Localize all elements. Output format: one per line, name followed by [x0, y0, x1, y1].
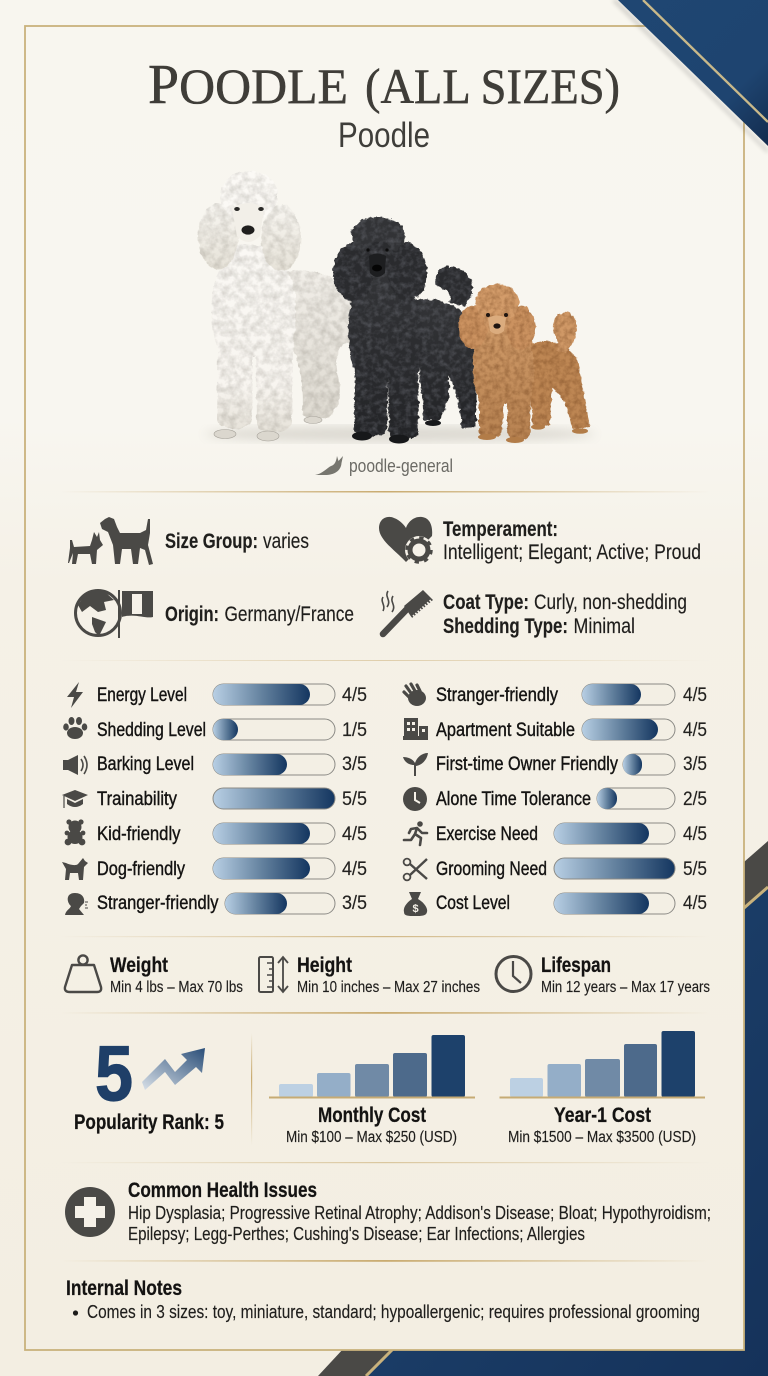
rating: alone time tolerance [403, 787, 707, 811]
rating: cost level: Cost Level [436, 892, 510, 914]
rating: stranger-friendly right: 4/5 [683, 684, 707, 706]
title: POODLE [148, 54, 348, 116]
icon: comb [382, 590, 433, 634]
stat: height [259, 953, 480, 996]
ground shadow [205, 426, 595, 442]
stat: weight: Weight [110, 953, 168, 977]
panel: common health issues: Epilepsy; Legg-Perthes; Cushing's Disease; Ear Infections; Allergies [128, 1223, 585, 1244]
black standard poodle [333, 217, 476, 444]
rating: stranger-friendly: Stranger-friendly [97, 892, 219, 914]
fact: size group: varies [263, 529, 309, 553]
rating: grooming need: 5/5 [683, 858, 707, 880]
rating: alone time tolerance: 2/5 [683, 788, 707, 810]
rating: dog-friendly [62, 858, 367, 880]
icon: globe and flag [76, 590, 153, 638]
rating: stranger-friendly [65, 892, 367, 915]
rating: barking level: 3/5 [342, 753, 367, 775]
stat: lifespan: Lifespan [541, 953, 611, 977]
rating: cost level [404, 892, 707, 916]
rating: first-time owner friendly: 3/5 [683, 753, 707, 775]
fact: origin: Origin: [165, 602, 219, 626]
rating: first-time owner friendly: First-time Owner Friendly [436, 753, 618, 775]
rating: barking level [63, 753, 367, 775]
rating: trainability [62, 788, 367, 810]
fact: coat and shedding type: Shedding Type: [443, 614, 568, 638]
rating: dog-friendly: Dog-friendly [97, 858, 185, 880]
corner: top right navy [612, 0, 768, 153]
panel: trait ratings left column [62, 682, 367, 915]
fact: temperament: Temperament: [443, 517, 558, 541]
icon: slug [315, 456, 343, 475]
rating: barking level: Barking Level [97, 753, 194, 775]
title [148, 54, 620, 116]
rating: exercise need: 4/5 [683, 823, 707, 845]
subtitle: Poodle [338, 116, 430, 155]
rating: kid-friendly: Kid-friendly [97, 823, 181, 845]
rating: grooming need [404, 858, 707, 880]
popularity rank: 5 [95, 1029, 133, 1117]
stat: height: Min 10 inches – Max 27 inches [297, 979, 480, 996]
chart: monthly cost: Monthly Cost [318, 1103, 426, 1127]
rating: shedding level: Shedding Level [97, 719, 206, 741]
rating: exercise need [404, 821, 707, 845]
icon: trend arrow [142, 1048, 205, 1090]
chart: year-1 cost: Min $1500 – Max $3500 (USD) [508, 1129, 696, 1146]
rating: alone time tolerance: Alone Time Tolerance [436, 788, 591, 810]
chart: year-1 cost [500, 1031, 705, 1146]
panel: common health issues: Common Health Issues [128, 1178, 317, 1202]
rating: exercise need: Exercise Need [436, 823, 538, 845]
panel: internal notes: Internal Notes [66, 1276, 182, 1300]
rating: kid-friendly: 4/5 [342, 823, 367, 845]
fact: coat and shedding type: Coat Type: [443, 590, 529, 614]
title: (ALL SIZES) [365, 58, 620, 114]
rating: apartment suitable: 4/5 [683, 719, 707, 741]
chart: monthly cost: Min $100 – Max $250 (USD) [286, 1129, 457, 1146]
rating: cost level: 4/5 [683, 892, 707, 914]
rating: stranger-friendly: 3/5 [342, 892, 367, 914]
panel: common health issues [65, 1178, 711, 1244]
rating: stranger-friendly right [404, 684, 707, 706]
stat: height: Height [297, 953, 352, 977]
rating: trainability: Trainability [97, 788, 177, 810]
rating: energy level: 4/5 [342, 684, 367, 706]
white standard poodle [198, 171, 356, 441]
rating: shedding level [63, 717, 367, 741]
apricot miniature poodle [458, 284, 590, 443]
stat: lifespan [496, 953, 710, 996]
icon: medical cross [65, 1187, 115, 1237]
panel: trait ratings right column [403, 684, 707, 916]
corner: bottom right navy [365, 841, 768, 1376]
stat: weight: Min 4 lbs – Max 70 lbs [110, 979, 243, 996]
fact: coat and shedding type: Minimal [574, 614, 635, 638]
rating: trainability: 5/5 [342, 788, 367, 810]
rating: cost level: $ [412, 903, 419, 915]
stat: lifespan: Min 12 years – Max 17 years [541, 979, 710, 996]
rating: stranger-friendly right: Stranger-friendly [436, 684, 558, 706]
rating: shedding level: 1/5 [342, 719, 367, 741]
rating: kid-friendly [65, 819, 367, 845]
fact: coat and shedding type [443, 590, 687, 638]
rating: energy level: Energy Level [97, 684, 187, 706]
chart: monthly cost [269, 1035, 475, 1146]
rating: first-time owner friendly [403, 753, 707, 776]
fact: size group: Size Group: [165, 529, 258, 553]
popularity rank [74, 1029, 224, 1134]
rating: apartment suitable [403, 718, 707, 741]
panel: internal notes [66, 1276, 700, 1322]
fact: temperament [443, 517, 701, 564]
popularity rank: Popularity Rank: 5 [74, 1110, 224, 1134]
rating: apartment suitable: Apartment Suitable [436, 719, 575, 741]
stat: weight [65, 953, 243, 996]
fact: temperament: Intelligent; Elegant; Active; Proud [443, 540, 701, 564]
chart: year-1 cost: Year-1 Cost [554, 1103, 651, 1127]
rating: dog-friendly: 4/5 [342, 858, 367, 880]
rating: energy level [67, 682, 367, 708]
rating: grooming need: Grooming Need [436, 858, 547, 880]
corner: bottom left grey band [318, 1348, 393, 1376]
fact: origin [165, 602, 354, 626]
icon: heart with gear [379, 517, 433, 564]
image caption: poodle-general: poodle-general [349, 456, 453, 476]
panel: breed facts [68, 517, 701, 638]
illustration: three poodles [198, 171, 595, 444]
image caption: poodle-general [315, 456, 453, 476]
icon: two dogs [68, 517, 153, 565]
fact: coat and shedding type: Curly, non-shedding [534, 590, 687, 614]
fact: origin: Germany/France [224, 602, 354, 626]
